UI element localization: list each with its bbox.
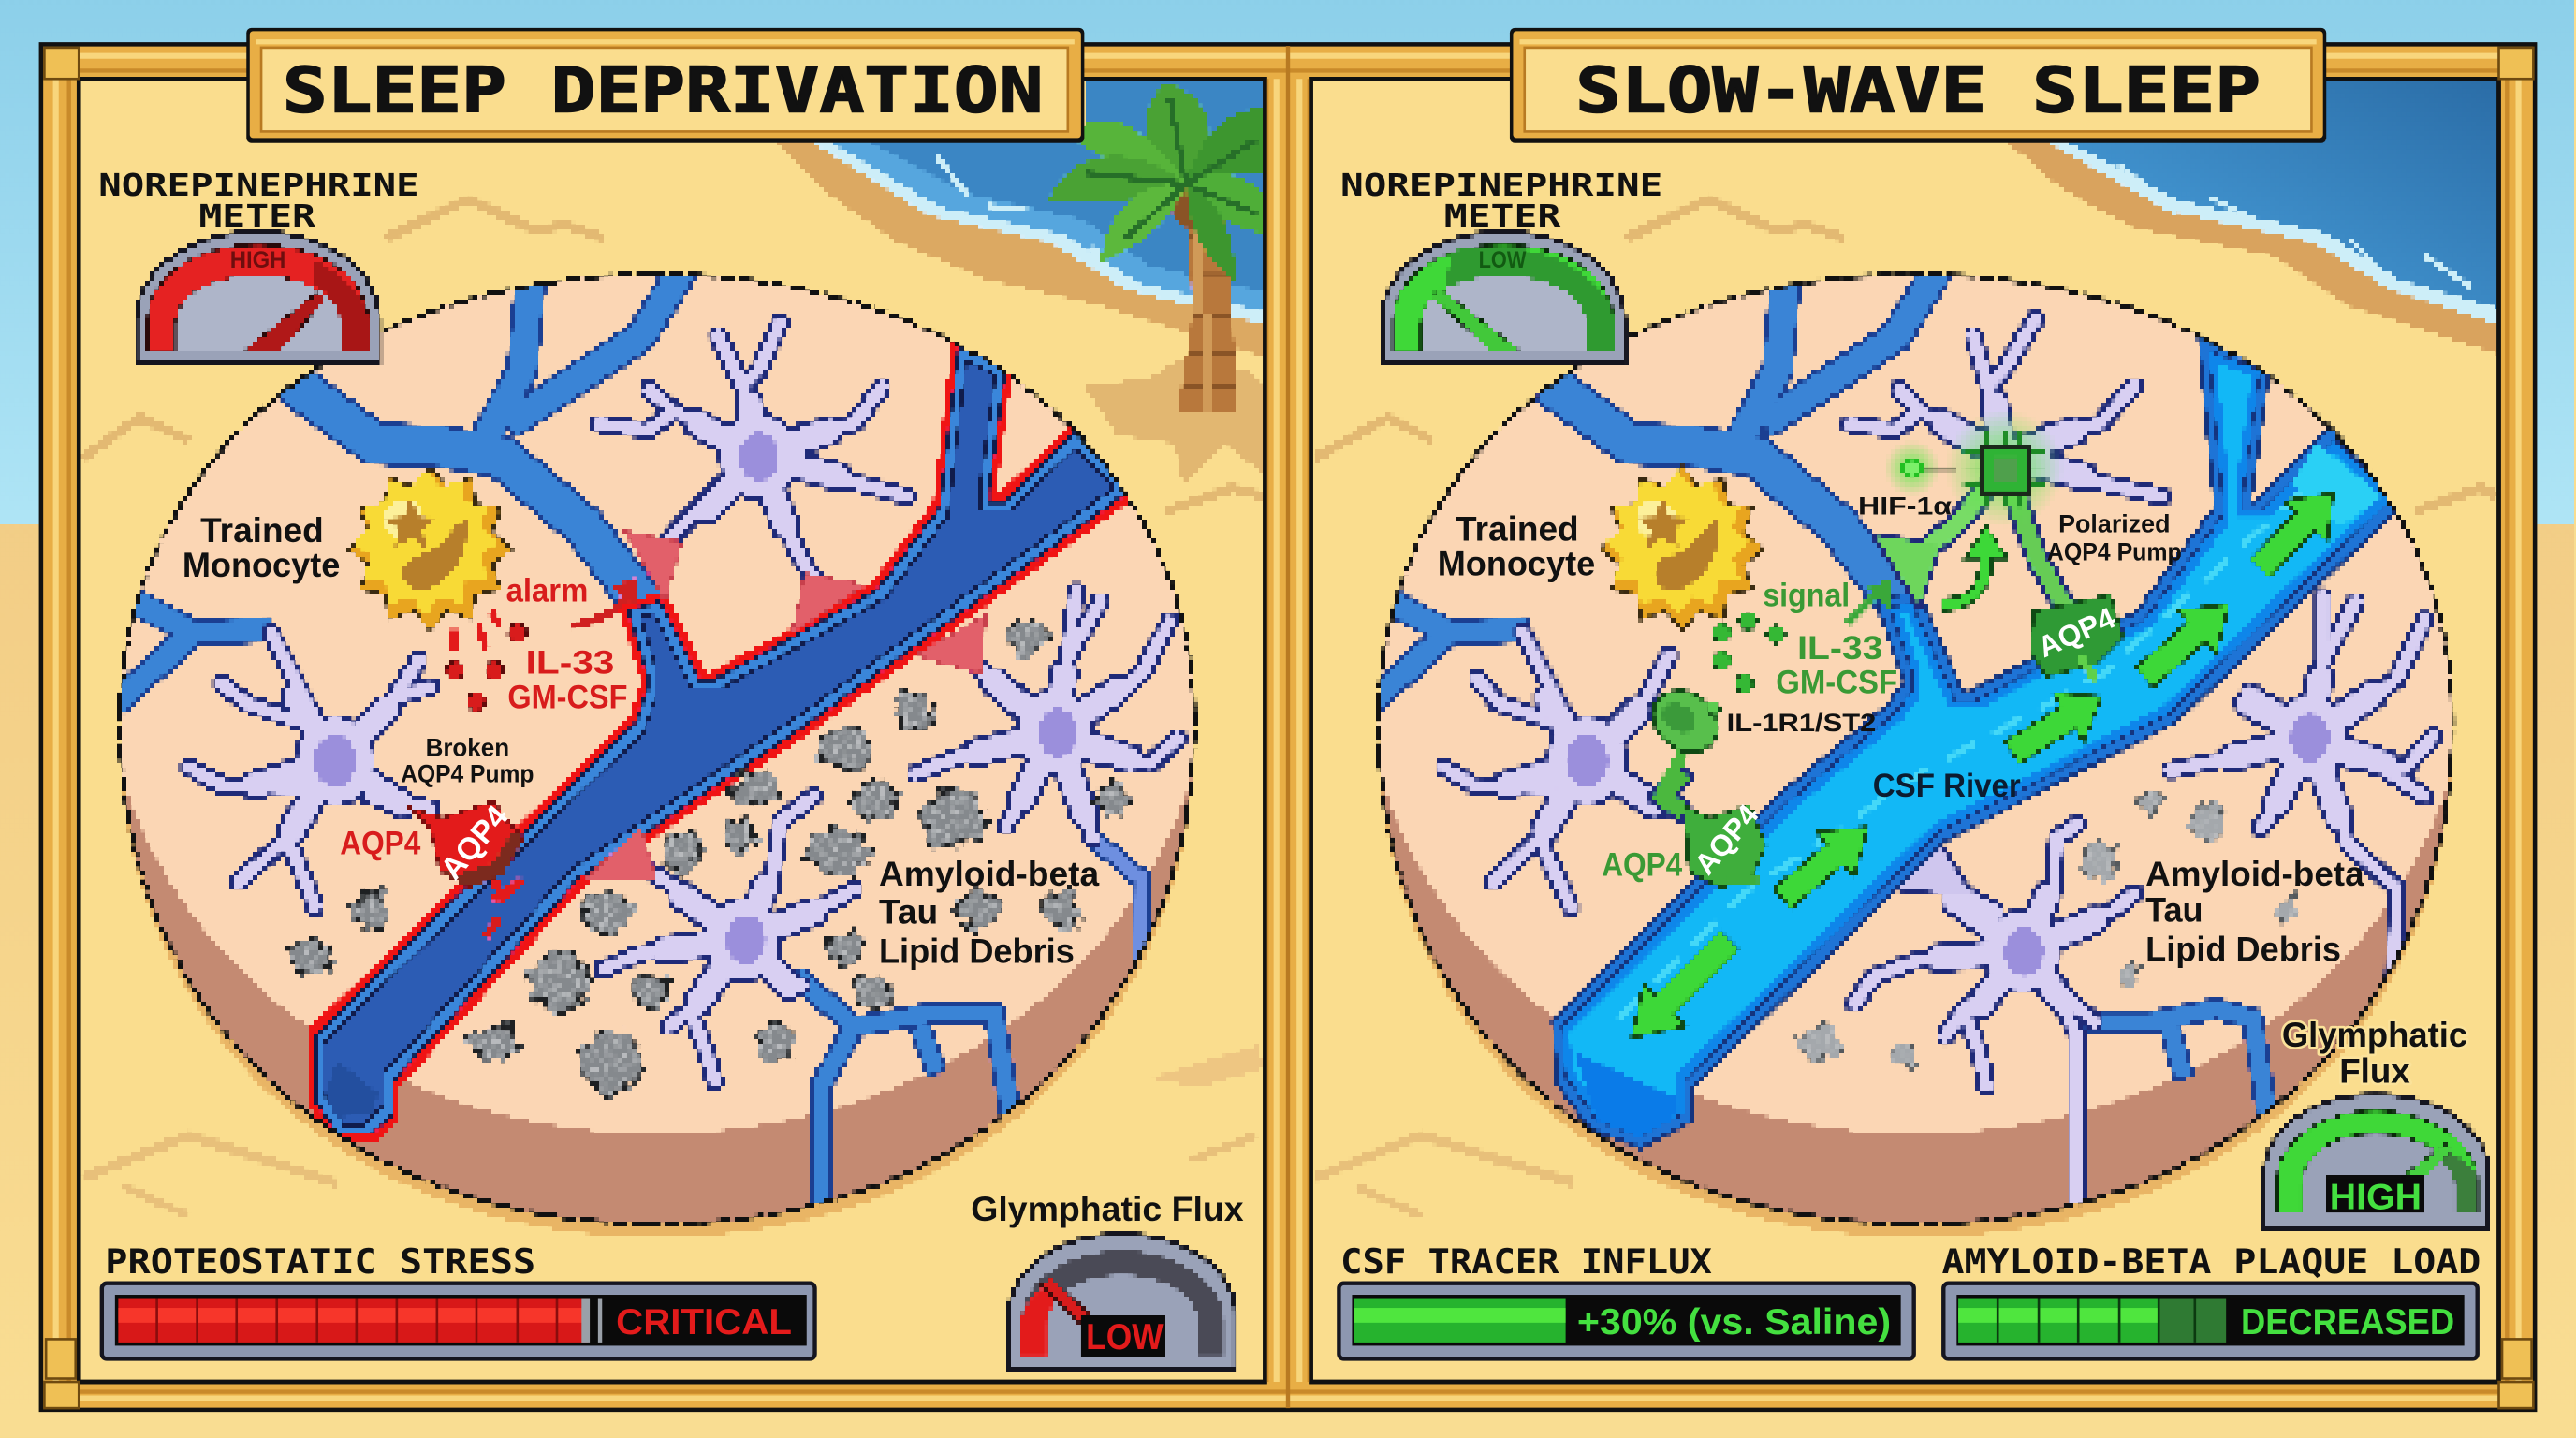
labels: left debris list	[879, 855, 1100, 970]
meter label right	[1340, 167, 1662, 234]
icon: HIF-1 alpha chip	[1884, 431, 2045, 507]
gauge: glymphatic flux low	[1009, 1234, 1236, 1369]
CSF river main vessel	[1551, 333, 2411, 1151]
label: AQP4 on broken pump: AQP4	[434, 799, 516, 887]
title plate: sleep deprivation	[246, 28, 1084, 143]
labels: left debris list: Amyloid-beta	[879, 855, 1100, 893]
disc outline	[1379, 274, 2452, 1225]
cytokine dots	[1713, 612, 1785, 693]
disc outline	[120, 274, 1194, 1225]
protein debris	[1801, 790, 2300, 1068]
label: glymphatic flux right: Flux	[2339, 1052, 2410, 1091]
labels: polarized pump	[2047, 509, 2182, 565]
panel: slow-wave sleep beach backdrop	[1311, 79, 2500, 1384]
astrocyte left	[1444, 633, 1669, 907]
labels: right debris list: Tau	[2145, 891, 2203, 930]
gauge: glymphatic flux high	[2264, 1094, 2489, 1227]
bar title: CSF TRACER INFLUX	[1340, 1241, 1712, 1282]
title text: SLOW-WAVE SLEEP	[1575, 53, 2261, 126]
polarized AQP4 pump	[2030, 594, 2123, 681]
labels: right panel cells: Monocyte	[1438, 544, 1595, 582]
astrocytes	[1444, 318, 2433, 1216]
astrocyte nuclei	[314, 433, 1077, 964]
label: AQP4 on lower pump: AQP4	[1688, 798, 1765, 881]
label: CSF River: CSF River	[1873, 768, 2021, 804]
panel: sleep deprivation beach backdrop	[79, 79, 1266, 1384]
astrocyte left	[189, 633, 431, 907]
labels: left panel cells: Monocyte	[183, 546, 340, 584]
astrocyte right	[915, 592, 1178, 838]
bar value: CRITICAL	[616, 1302, 792, 1343]
small blue vessels	[1370, 263, 2269, 1125]
bar: CSF tracer influx	[1339, 1241, 1914, 1358]
label: glymphatic flux right: Glymphatic	[2282, 1016, 2467, 1054]
label: IL-1R1/ST2: IL-1R1/ST2	[1727, 708, 1876, 737]
icon: palm tree	[1048, 82, 1281, 485]
label: LOW in gauge: LOW	[1086, 1317, 1164, 1357]
green fill	[1354, 1299, 1566, 1343]
gauge: norepinephrine high	[137, 231, 379, 361]
broken AQP4 pump	[411, 801, 522, 936]
meter label left: METER	[198, 198, 316, 234]
labels: broken pump: Broken	[426, 732, 509, 761]
labels: right debris list: Amyloid-beta	[2145, 855, 2364, 893]
green flow arrows	[1611, 473, 2354, 1059]
astrocyte top	[600, 322, 907, 607]
arrow: alarm signal	[570, 577, 637, 626]
label: glymphatic flux left: Glymphatic Flux	[971, 1190, 1244, 1228]
bar title: PROTEOSTATIC STRESS	[105, 1241, 535, 1282]
disc shadow	[120, 287, 1194, 1238]
labels: right cytokines: signal	[1763, 578, 1850, 614]
cytokine dots and dashes	[446, 611, 527, 711]
bar value: +30% (vs. Saline)	[1577, 1302, 1891, 1343]
meter label right: NOREPINEPHRINE	[1340, 167, 1662, 203]
labels: right panel cells	[1438, 509, 1595, 582]
bar: amyloid-beta plaque load	[1942, 1241, 2481, 1358]
astrocyte endfeet (red tinted)	[583, 531, 986, 881]
bar: proteostatic stress	[102, 1241, 815, 1358]
labels: left debris list: Tau	[879, 892, 938, 931]
label: HIF-1 alpha: HIF-1α	[1858, 491, 1952, 520]
labels: broken pump	[401, 732, 534, 787]
labels: right panel cells: Trained	[1456, 509, 1579, 548]
trained monocyte cell	[348, 466, 513, 631]
meter label left	[98, 167, 419, 234]
disc tissue	[122, 276, 1193, 1226]
label: HIGH in gauge: HIGH	[2330, 1178, 2422, 1218]
astrocyte bottom	[1855, 825, 2134, 1216]
labels: broken pump: AQP4 Pump	[401, 758, 534, 787]
labels: right cytokines	[1763, 578, 1897, 701]
disc tissue	[1357, 181, 2474, 1249]
labels: left cytokines	[506, 572, 627, 715]
labels: left cytokines: GM-CSF	[507, 679, 627, 715]
arrow: curved upregulation	[1940, 526, 2008, 605]
labels: polarized pump: Polarized	[2058, 509, 2170, 538]
astrocytes	[189, 322, 1178, 1081]
astrocyte top	[1850, 318, 2162, 496]
lower AQP4 pump	[1684, 805, 1766, 888]
IL-1R1/ST2 receptor dish	[1641, 679, 1730, 805]
main vessel with red border	[309, 333, 1147, 1140]
small blue vessels	[115, 263, 1142, 1232]
label: glymphatic flux right	[2282, 1016, 2467, 1091]
labels: right debris list	[2145, 855, 2364, 969]
gauge label: HIGH: HIGH	[230, 248, 285, 273]
title text: SLEEP DEPRIVATION	[283, 53, 1043, 126]
bar title: AMYLOID-BETA PLAQUE LOAD	[1942, 1241, 2481, 1282]
gauge: norepinephrine low	[1382, 231, 1625, 361]
labels: right debris list: Lipid Debris	[2145, 931, 2341, 969]
gauge label: LOW: LOW	[1479, 248, 1527, 273]
panel: sleep deprivation brain disc	[117, 271, 1198, 1236]
title plate: slow-wave sleep	[1510, 28, 2326, 143]
label: AQP4 on polarized pump: AQP4	[2033, 600, 2120, 664]
green segments	[1958, 1299, 2226, 1343]
labels: right cytokines: IL-33	[1797, 630, 1882, 667]
glow around chip	[1945, 409, 2063, 527]
labels: left debris list: Lipid Debris	[879, 932, 1075, 970]
label: AQP4 red: AQP4	[340, 826, 421, 862]
bar value: DECREASED	[2241, 1302, 2454, 1343]
panel: slow-wave sleep brain disc	[1357, 181, 2474, 1249]
labels: right cytokines: GM-CSF	[1776, 665, 1897, 701]
astrocyte nuclei	[1566, 713, 2330, 976]
disc shadow	[1379, 287, 2452, 1238]
astrocyte right	[2170, 596, 2433, 1007]
labels: left panel cells: Trained	[200, 511, 324, 550]
red segments	[118, 1299, 602, 1343]
river highlights and end cap	[1573, 444, 2382, 1137]
labels: left cytokines: alarm	[506, 572, 588, 609]
protein debris	[291, 618, 1129, 1093]
trained monocyte cell	[1600, 466, 1764, 631]
labels: polarized pump: AQP4 Pump	[2047, 536, 2182, 565]
meter label right: METER	[1444, 198, 1562, 234]
green astrocyte arms	[1662, 468, 2073, 814]
arrow: signal	[1847, 579, 1893, 624]
label: AQP4 green: AQP4	[1602, 846, 1683, 883]
vessel end cap shade	[326, 1060, 378, 1117]
astrocyte bottom	[603, 797, 855, 1081]
labels: left panel cells	[183, 511, 340, 584]
labels: left cytokines: IL-33	[526, 645, 614, 682]
meter label left: NOREPINEPHRINE	[98, 167, 419, 203]
